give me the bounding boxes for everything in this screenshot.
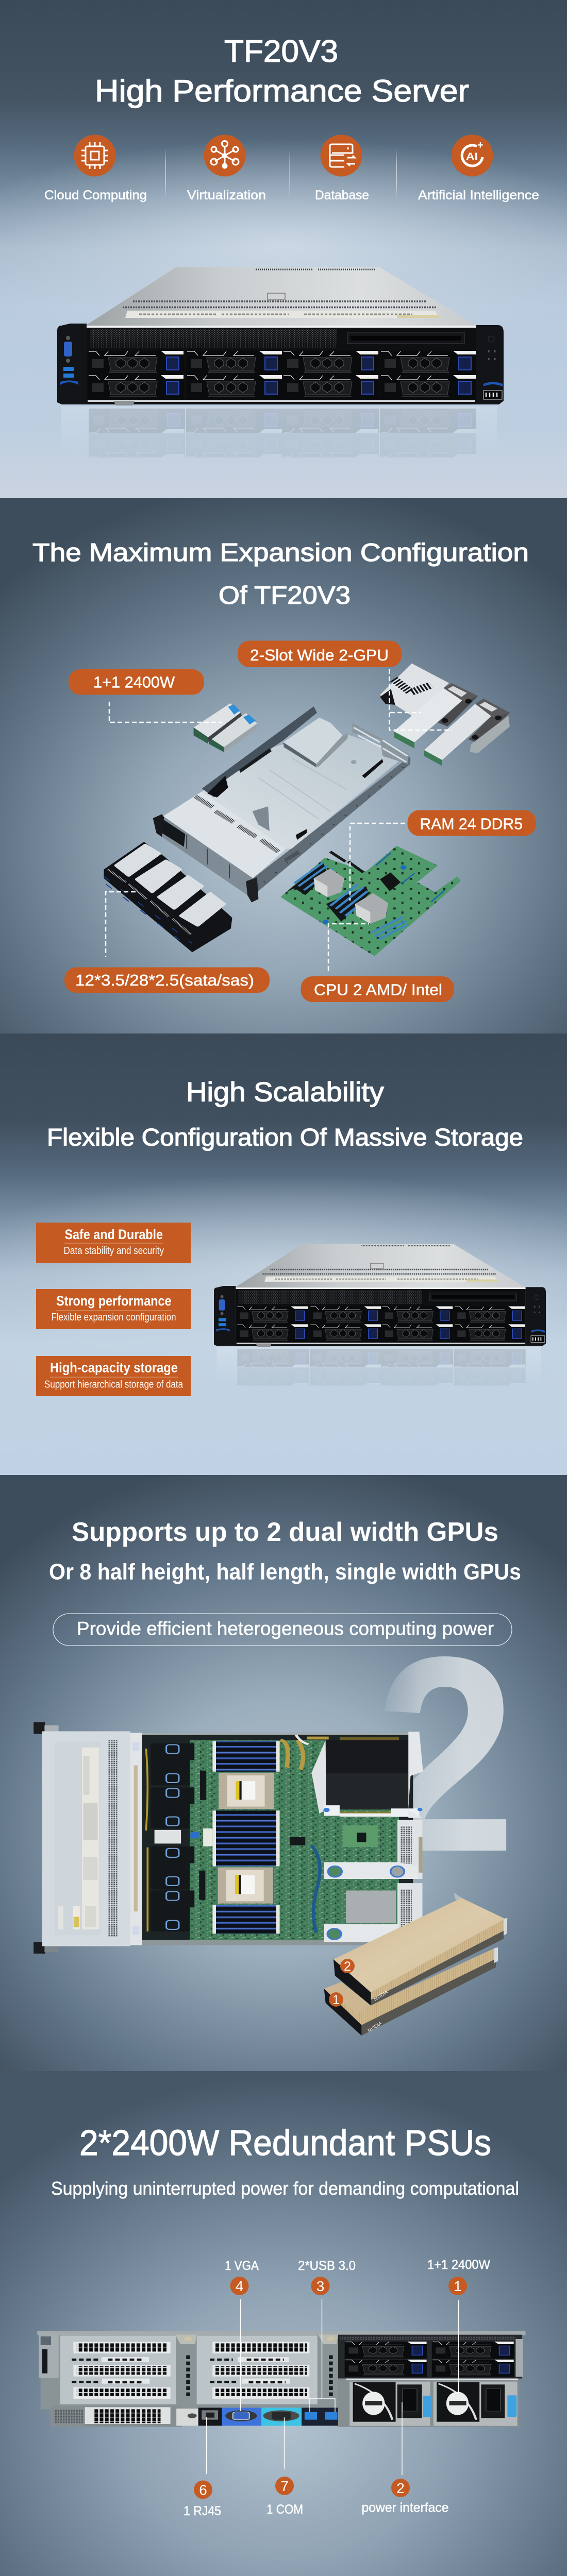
title: model name: TF20V3 [224,34,338,69]
badge: GPU 1 [329,1992,343,2007]
label: cloud computing: Cloud Computing [44,188,147,202]
icon: virtualization network [204,135,245,176]
callout 1: power supply: 1+1 2400W [427,2258,490,2272]
feature box: safe and durable: Safe and Durable [65,1227,163,1242]
badge: GPU 2: 2 [344,1959,351,1974]
feature box: safe and durable [36,1223,191,1263]
callout 7: COM: 1 COM [266,2502,303,2517]
pill: gpu: 2-Slot Wide 2-GPU [250,646,389,664]
callout 2: power interface: power interface [362,2501,448,2515]
feature box: strong performance [36,1289,191,1329]
callout 2: power interface [362,2479,448,2515]
GPU brand mark: bottom card: NVIDIA [367,2021,382,2033]
callout 6: RJ45: 1 RJ45 [184,2504,221,2518]
callout 1: power supply [427,2258,490,2295]
heading: high scalability: High Scalability [186,1077,385,1108]
panel: high scalability [0,1077,567,1475]
callout 7: COM: 7 [280,2478,289,2494]
callout 7: COM [266,2477,303,2517]
panel: hero [0,34,567,498]
icon: artificial intelligence [452,135,493,176]
panel: GPU support [0,1475,567,2071]
title: high performance server: High Performance Server [95,74,469,108]
callout 6: RJ45: 6 [199,2482,207,2498]
callout 6: RJ45 [184,2480,221,2518]
feature box: high-capacity storage: High-capacity storage [50,1360,178,1376]
pill: psu [69,669,204,694]
label: database: Database [315,188,369,202]
callout 3: USB: 2*USB 3.0 [298,2259,356,2273]
icon: database [321,135,362,176]
outlined pill [53,1614,512,1646]
pill: drives [64,968,270,993]
pill: cpu: CPU 2 AMD/ Intel [314,981,442,998]
heading line 1: The Maximum Expansion Configuration [32,539,529,567]
callout 4: VGA [225,2259,259,2295]
feature box: high-capacity storage: Support hierarchical storage of data [44,1379,184,1390]
server front image [214,1244,546,1385]
GPU riser assembly [380,664,510,766]
hard drive stack [104,842,232,952]
feature box: strong performance: Strong performance [56,1293,171,1309]
feature box: safe and durable: Data stability and security [64,1245,164,1257]
heading: dual width GPUs: Supports up to 2 dual width GPUs [72,1517,498,1547]
panel: maximum expansion configuration [0,499,567,1033]
GPU cards [324,1893,507,2036]
callout 1: power supply: 1 [454,2278,462,2294]
callout 3: USB: 3 [316,2278,324,2294]
pill: gpu [238,641,402,667]
motherboard [280,846,461,956]
pill: ram [407,810,536,836]
icon: cloud computing chip [74,135,115,176]
outlined pill: Provide efficient heterogeneous computing power [77,1618,494,1639]
badge: GPU 1: 1 [332,1993,340,2007]
panel: redundant PSUs [0,2071,567,2576]
callout leader lines [206,2299,459,2475]
callout 4: VGA: 1 VGA [225,2259,259,2273]
server top view [34,1722,423,1954]
label: virtualization: Virtualization [187,188,266,202]
icon: artificial intelligence: + [477,140,483,151]
heading: single width GPUs: Or 8 half height, half length, single width GPUs [49,1559,521,1585]
PSU modules [194,703,257,752]
heading: 2*2400W Redundant PSUs [79,2123,491,2163]
chassis exploded view [153,706,410,902]
heading: flexible configuration: Flexible Configuration Of Massive Storage [47,1123,523,1151]
label: artificial intelligence: Artificial Intelligence [418,188,539,202]
callout 2: power interface: 2 [396,2480,405,2496]
icon: artificial intelligence: AI [466,151,478,162]
big numeral 2: 2 [374,1599,516,1910]
pill: psu: 1+1 2400W [93,673,175,691]
heading line 2: Of TF20V3 [219,582,351,609]
feature box: strong performance: Flexible expansion configuration [52,1312,176,1323]
callout 4: VGA: 4 [236,2278,243,2294]
pill: cpu [301,976,454,1002]
server front image [57,267,504,457]
subheading: Supplying uninterrupted power for demanding computational [51,2178,519,2199]
pill: drives: 12*3.5/28*2.5(sata/sas) [75,971,254,989]
server rear view [37,2331,525,2427]
dashed leader lines [106,669,452,971]
badge: GPU 2 [340,1959,355,1974]
callout 3: USB [298,2259,356,2295]
GPU brand mark: top card: NVIDIA [373,1989,389,2002]
feature box: high-capacity storage [36,1356,191,1396]
pill: ram: RAM 24 DDR5 [420,815,523,833]
